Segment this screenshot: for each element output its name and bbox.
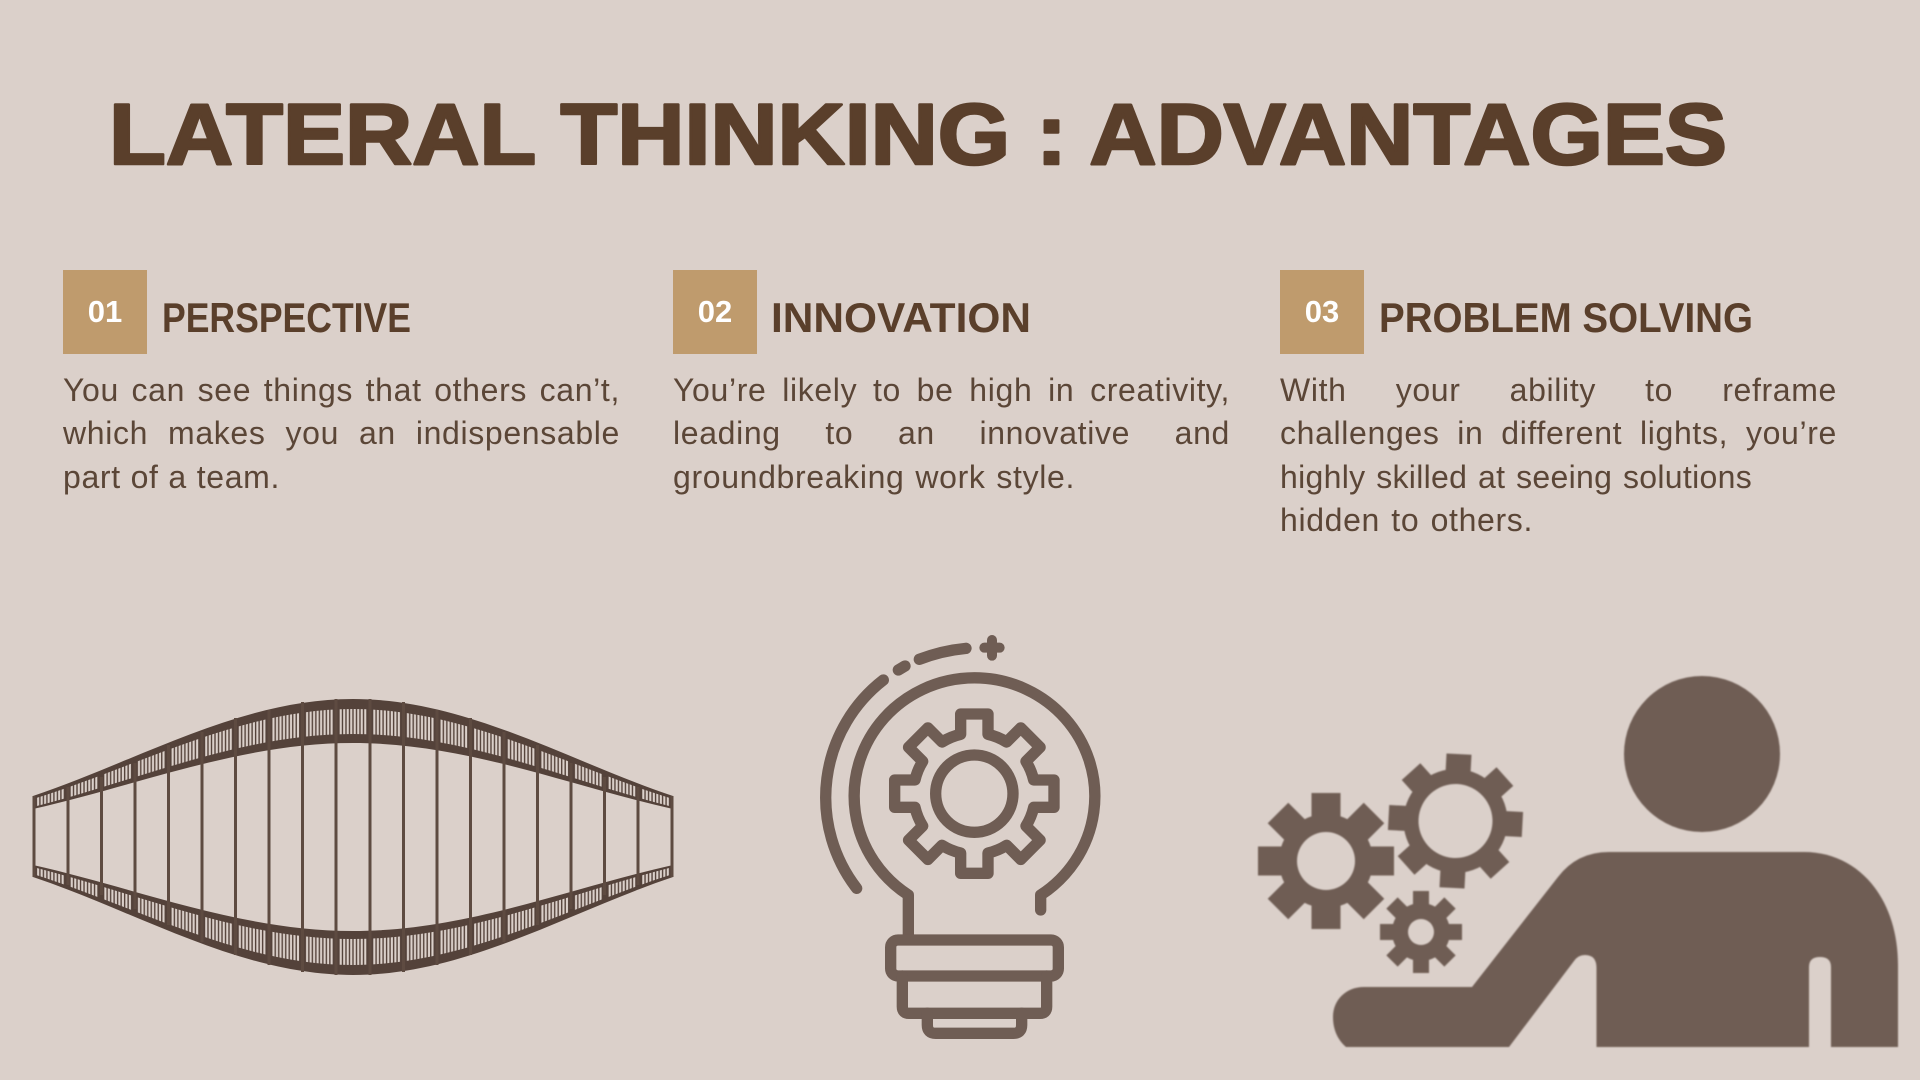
icon: film strip — [32, 699, 674, 975]
top sprocket holes — [33, 709, 673, 807]
body text: challenges in different lights, you’re — [1280, 415, 1837, 451]
panel: innovation — [673, 270, 1230, 495]
body text: With your ability to reframe — [1280, 372, 1837, 408]
body text: hidden to others. — [1280, 502, 1533, 538]
body text: You can see things that others can’t, — [63, 372, 620, 408]
body text — [673, 372, 1230, 495]
outer glow arc — [826, 648, 966, 888]
large left gear — [1258, 793, 1394, 929]
body text: which makes you an indispensable — [63, 415, 620, 451]
frame lines — [34, 699, 672, 975]
bottom sprocket holes — [33, 867, 673, 965]
body text: part of a team. — [63, 459, 280, 495]
body text: groundbreaking work style. — [673, 459, 1075, 495]
upper right gear — [1385, 751, 1526, 891]
body text — [1280, 372, 1837, 538]
gear — [895, 714, 1054, 873]
heading: perspective: PERSPECTIVE — [162, 294, 411, 341]
icon: light bulb with gear — [820, 635, 1100, 1039]
number badge 01 — [63, 270, 147, 354]
body text: leading to an innovative and — [673, 415, 1230, 451]
body text: highly skilled at seeing solutions — [1280, 459, 1752, 495]
panel: problem solving — [1280, 270, 1837, 538]
body text — [63, 372, 620, 495]
number badge 03 — [1280, 270, 1364, 354]
number badge 02: 02 — [698, 294, 732, 329]
bottom perforated band — [33, 865, 673, 975]
bulb base — [891, 940, 1058, 1033]
panel: perspective — [63, 270, 620, 495]
heading: innovation: INNOVATION — [771, 294, 1031, 341]
heading: problem solving: PROBLEM SOLVING — [1379, 294, 1753, 341]
head — [1624, 676, 1780, 832]
top perforated band — [33, 699, 673, 809]
body — [1333, 852, 1898, 1047]
bulb outline — [854, 678, 1095, 938]
sparkle — [984, 640, 1000, 656]
number badge 01: 01 — [88, 294, 122, 329]
number badge 03: 03 — [1305, 294, 1339, 329]
number badge 02 — [673, 270, 757, 354]
icon: person with gears — [1257, 675, 1899, 1048]
small gear — [1380, 891, 1462, 973]
body text: You’re likely to be high in creativity, — [673, 372, 1230, 408]
